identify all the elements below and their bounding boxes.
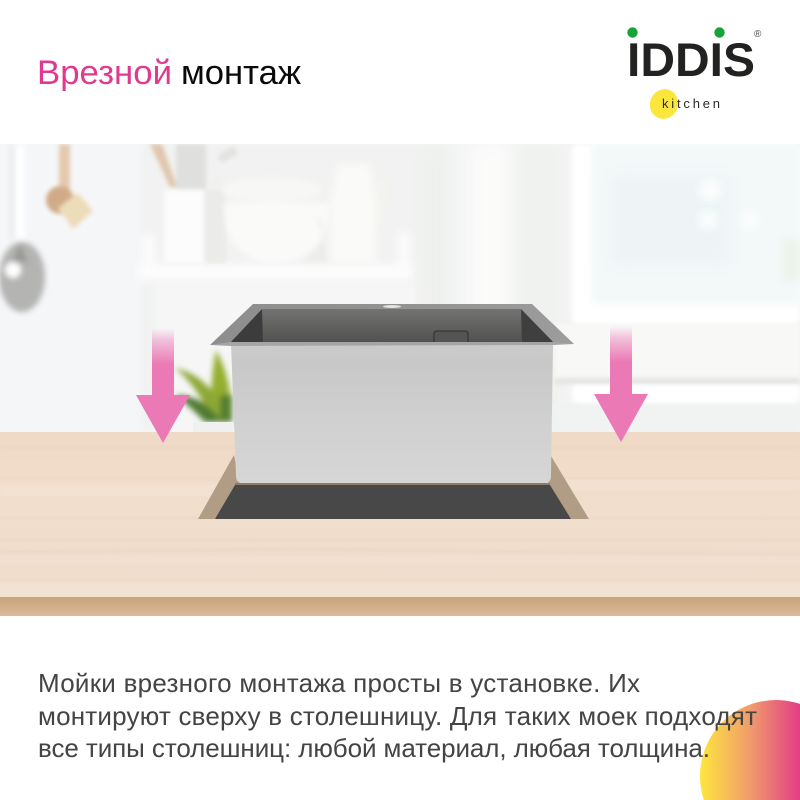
- title: [37, 54, 301, 92]
- hanging brush: [46, 144, 93, 229]
- sink inner corners: [231, 309, 263, 342]
- arrow: right down: [594, 326, 648, 442]
- utensil holder: [150, 144, 239, 263]
- kitchen background photo: [0, 144, 800, 432]
- decorative gradient circle: [700, 700, 800, 800]
- cut-out in countertop: [198, 455, 589, 519]
- curtain folds: [425, 144, 565, 432]
- description text: все типы столешниц: любой материал, любая толщина.: [38, 733, 710, 763]
- plant pot: [200, 422, 233, 426]
- logo: IDDIS kitchen: [627, 27, 762, 124]
- chipboard left side: [198, 455, 240, 519]
- title: Врезной: [37, 54, 172, 92]
- chipboard right side: [548, 456, 589, 519]
- dark opening: [215, 485, 571, 519]
- window: [572, 144, 800, 324]
- white jug: [334, 170, 372, 258]
- logo yellow spot: [645, 84, 683, 124]
- sink front lip: [210, 342, 574, 346]
- logo kitchen label: kitchen: [662, 96, 720, 111]
- countertop front edge: [0, 597, 800, 616]
- description text: Мойки врезного монтажа просты в установке. Их: [38, 668, 640, 698]
- logo wordmark: IDDIS: [627, 33, 755, 86]
- logo registered mark: ®: [754, 29, 762, 40]
- wooden countertop: [0, 432, 800, 616]
- sink body: [231, 344, 553, 483]
- logo green dots: [627, 27, 725, 38]
- drain cover: [434, 331, 468, 342]
- description text: [38, 668, 757, 763]
- description text: монтируют сверху в столешницу. Для таких моек подходят: [38, 701, 757, 731]
- window sill: [556, 378, 800, 402]
- faucet hole: [383, 305, 401, 308]
- sink: [210, 304, 574, 483]
- shelving unit: [138, 144, 430, 432]
- sink rim: [210, 304, 574, 345]
- wall left: [0, 144, 140, 432]
- white bowls: [226, 204, 324, 258]
- green plant: [175, 350, 232, 422]
- sink inner opening: [231, 309, 553, 342]
- hanging ladle: [0, 144, 45, 312]
- arrow: left down: [136, 328, 190, 443]
- title: монтаж: [181, 54, 301, 92]
